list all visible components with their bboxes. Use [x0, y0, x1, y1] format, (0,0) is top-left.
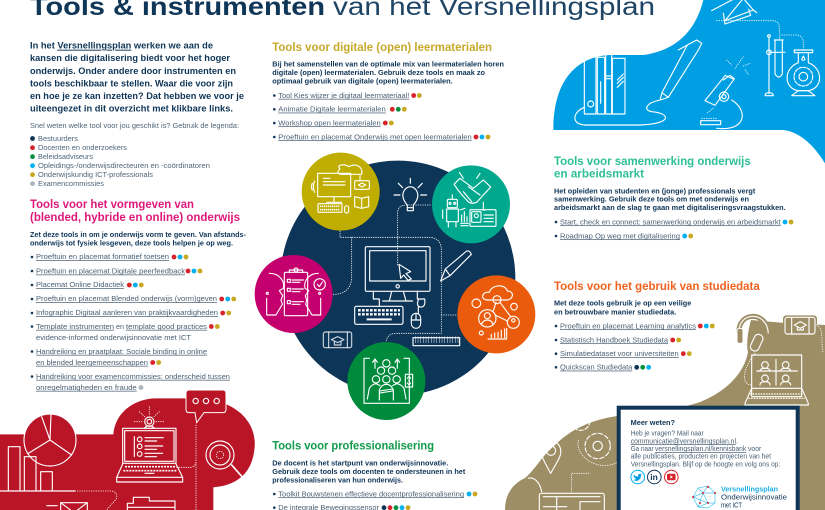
description [554, 186, 786, 212]
contact text: Ga naar [631, 444, 654, 453]
tool list: Placemat Online Didactiek [36, 280, 124, 289]
contact text: Versnellingsplan. Blijf op de hoogte en volg ons op: [631, 459, 780, 468]
social icons [631, 470, 678, 484]
tool list: Workshop open leermaterialen [278, 118, 381, 127]
icon: map pin [541, 441, 590, 492]
central diagram [255, 153, 535, 420]
contact text: . [736, 436, 738, 445]
panel: samenwerking [554, 154, 793, 240]
heading: (blended, hybride en online) onderwijs [30, 210, 240, 224]
contact heading: Meer weten? [631, 418, 675, 427]
icon: video call laptop [745, 355, 808, 405]
tool list: evidence-informed onderwijsinnovatie met ICT [36, 333, 192, 342]
icon: laptop [117, 407, 183, 482]
legend: Onderwijskundig ICT-professionals [38, 172, 154, 179]
description: optimaal gebruik van digitale (open) leermaterialen. [272, 77, 453, 86]
tool list [555, 321, 715, 372]
intro text: kansen die digitalisering biedt voor het hoger [30, 53, 230, 64]
description: Het opleiden van studenten en (jonge) professionals vergt [554, 186, 756, 195]
panel: meer weten [619, 408, 798, 510]
tool list: Proeftuin en placemat Digitale peerfeedback [36, 266, 185, 276]
icon: graduation cap [712, 0, 803, 50]
tool list: Animatie Digitale leermaterialen [278, 105, 386, 114]
circle: formgiving [255, 255, 333, 333]
description: en betrouwbare manier studiedata. [554, 307, 676, 316]
tool list [273, 91, 490, 141]
tool list: Start, check en connect: samenwerking onderwijs en arbeidsmarkt [560, 217, 781, 226]
heading: en arbeidsmarkt [554, 166, 644, 180]
icon: envelope and folder [47, 497, 175, 510]
legend [30, 123, 239, 188]
icon: phone [783, 315, 823, 353]
icon: bar chart [0, 447, 117, 510]
intro text: tools beschikbaar te stellen. Waar die voor zijn [30, 78, 233, 89]
description: digitale (open) leermaterialen. Gebruik deze tools en maak zo [272, 68, 486, 77]
social icons: in [650, 472, 658, 482]
description: Met deze tools gebruik je op een veilige [554, 299, 691, 308]
intro text: onderwijs. Onder andere door instrumenten en [30, 66, 236, 77]
tool list: Tool Kies wijzer je digitaal leermateriaal! [278, 91, 409, 100]
circle: professionalisation [347, 342, 425, 420]
tool list: en [116, 322, 124, 331]
tool list: Statistisch Handboek Studiedata [560, 335, 668, 344]
heading: Tools voor het gebruik van studiedata [554, 279, 760, 293]
circle: cooperation [432, 165, 510, 243]
description: samenwerking. Gebruik deze tools om met onderwijs en [554, 195, 749, 204]
tool list: Proeftuin en placemat Blended onderwijs (vorm)geven [36, 294, 217, 303]
icon: speech bubble [177, 390, 226, 510]
legend: Beleidsadviseurs [38, 154, 94, 161]
tool list [273, 489, 477, 510]
contact text: alle publicaties, producten en projecten van het [631, 452, 771, 461]
icon: pie chart [24, 414, 76, 466]
tool list: Proeftuin en placemat Onderwijs met open leermaterialen [278, 132, 472, 141]
description [30, 230, 247, 247]
heading: Tools voor het vormgeven van [30, 197, 194, 211]
tool list: onregelmatigheden en fraude [36, 383, 137, 392]
legend: Bestuurders [38, 136, 79, 143]
icon: gears [571, 412, 617, 466]
heading: Tools voor samenwerking onderwijs [554, 154, 751, 168]
tool list [31, 252, 236, 392]
intro text: uiteengezet in dit overzicht met klikbare links. [30, 103, 233, 114]
description: De docent is het startpunt van onderwijsinnovatie. [272, 459, 448, 468]
dotted connectors [333, 205, 457, 342]
icon: ruler [413, 338, 460, 346]
intro text: In het Versnellingsplan werken we aan de [30, 41, 213, 52]
panel: vormgeven [30, 197, 247, 392]
legend: Opleidings-/onderwijsdirecteuren en -coördinatoren [38, 163, 210, 170]
description: Zet deze tools in om je onderwijs vorm te geven. Van afstands- [30, 230, 247, 239]
circle: digital materials [302, 153, 380, 231]
legend: Examencommissies [38, 181, 105, 188]
contact text: voor [748, 444, 762, 453]
description [272, 60, 504, 86]
heading: Tools voor digitale (open) leermaterialen [272, 40, 492, 54]
contact text: Heb je vragen? Mail naar [631, 429, 704, 438]
tool list: Roadmap Op weg met digitalisering [560, 231, 680, 240]
description: onderwijs tot fysiek lesgeven, deze tools helpen je op weg. [30, 238, 233, 247]
icon: light bulb [394, 178, 427, 211]
logo [692, 485, 787, 509]
tool list: Proeftuin en placemat formatief toetsen [36, 252, 169, 261]
heading [554, 154, 751, 180]
blue illustration panel [553, 0, 825, 163]
icon: phone with cap [323, 332, 352, 348]
icon: desktop computer [355, 247, 430, 328]
tool list: Proeftuin en placemat Learning analytics [560, 321, 696, 330]
red illustration panel [0, 390, 255, 510]
tool list: Template instrumenten [36, 322, 114, 331]
description: Bij het samenstellen van de optimale mix van leermaterialen horen [272, 60, 504, 69]
tan illustration panel [505, 320, 825, 510]
navy disc [281, 161, 515, 395]
tool list: Simulatiedataset voor universiteiten [560, 349, 679, 358]
circle: study data [457, 275, 535, 353]
tool list: Quickscan Studiedata [560, 363, 632, 372]
heading [30, 197, 240, 224]
logo: met ICT [721, 500, 742, 509]
tool list: template good practices [126, 322, 207, 331]
panel: professionalisering [272, 438, 477, 510]
intro text: en hoe je ze kan inzetten? Dat hebben we voor je [30, 91, 244, 102]
contact text: communicatie@versnellingsplan.nl [631, 436, 736, 445]
tool list [555, 217, 793, 240]
icon: headphones [737, 316, 768, 385]
contact text: versnellingsplan.nl/kennisbank [655, 444, 747, 453]
tool list: en blended leergemeenschappen [36, 358, 148, 367]
logo: Versnellingsplan [721, 485, 778, 494]
intro text [30, 41, 244, 114]
contact text [631, 429, 780, 468]
tool list: Handreiking en praatplaat: Sociale binding in online [36, 347, 207, 356]
tan illustrations [528, 412, 617, 510]
description: professionaliseren van hun onderwijs. [272, 476, 403, 485]
description [554, 299, 691, 316]
panel: digitale leermaterialen [272, 40, 504, 141]
description: Gebruik deze tools om docenten te ondersteunen in het [272, 467, 466, 476]
icon: lab flask and test tube [765, 35, 820, 96]
legend: Snel weten welke tool voor jou geschikt is? Gebruik de legenda: [30, 123, 239, 130]
description [272, 459, 466, 485]
title [30, 0, 655, 21]
tool list: Toolkit Bouwstenen effectieve docentprofessionalisering [278, 489, 464, 498]
icon: pen [660, 40, 702, 100]
tool list: Infographic Digitaal aanleren van praktijkvaardigheden [36, 308, 218, 317]
icon: cloud and map [528, 478, 604, 510]
heading: Tools voor professionalisering [272, 438, 434, 452]
icon: microscope [701, 57, 750, 137]
panel: studiedata [554, 279, 760, 372]
description: arbeidsmarkt aan de slag te gaan met digitaliseringsvraagstukken. [554, 203, 786, 212]
logo: Onderwijsinnovatie [721, 492, 787, 501]
tool list: Handreiking voor examencommissies: onderscheid tussen [36, 372, 230, 381]
icon: magnifying glass [206, 441, 245, 480]
icon: pencil [441, 251, 471, 281]
legend: Docenten en onderzoekers [38, 145, 128, 152]
icon: books [575, 51, 665, 125]
